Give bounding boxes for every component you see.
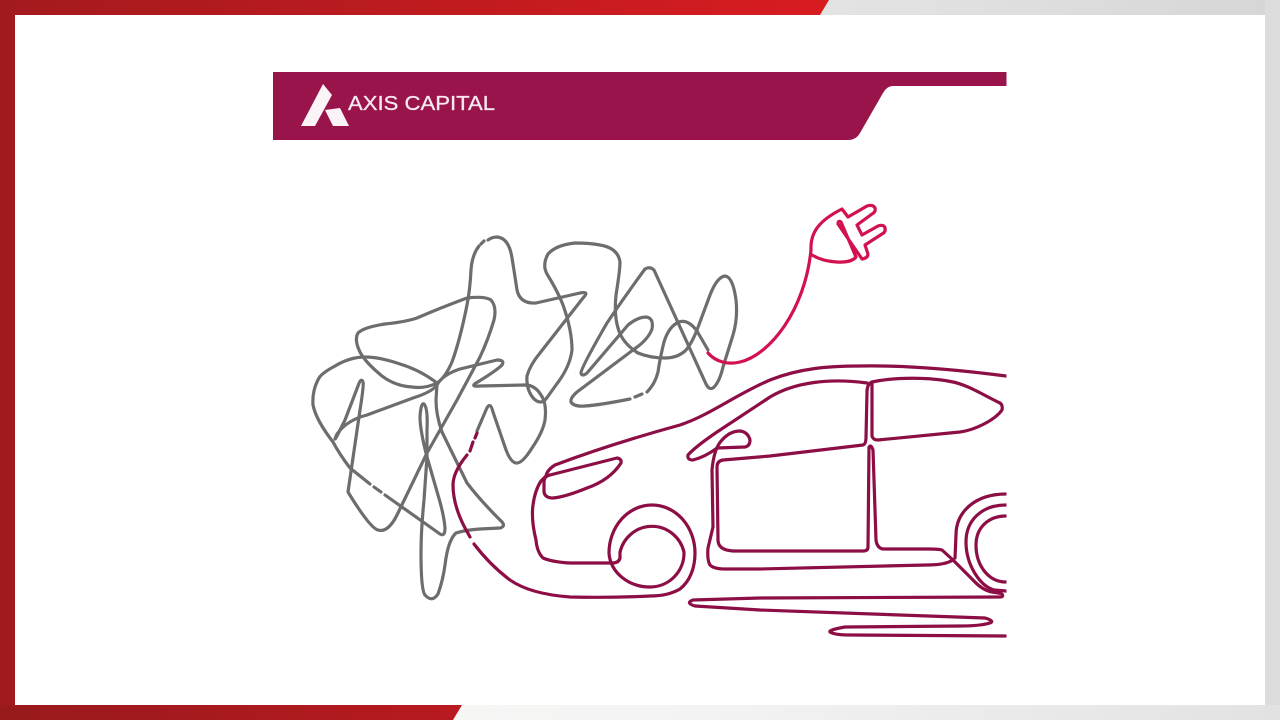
logo wordmark: AXIS CAPITAL <box>348 92 495 115</box>
rear wheel arcs and ground lines <box>955 494 1006 558</box>
illustration: tangled line becoming an electric car <box>313 205 1006 636</box>
icon: plug <box>811 205 885 262</box>
icon: Axis logo mark <box>301 84 349 126</box>
front window and door <box>688 381 953 569</box>
pink power cord and plug <box>708 205 885 363</box>
headlight <box>544 458 621 498</box>
maroon car outline <box>453 366 1006 636</box>
header banner <box>273 72 1006 140</box>
tangled grey line <box>313 237 737 599</box>
car body, hood and front wheel <box>474 366 1006 597</box>
rear window <box>872 378 1002 440</box>
